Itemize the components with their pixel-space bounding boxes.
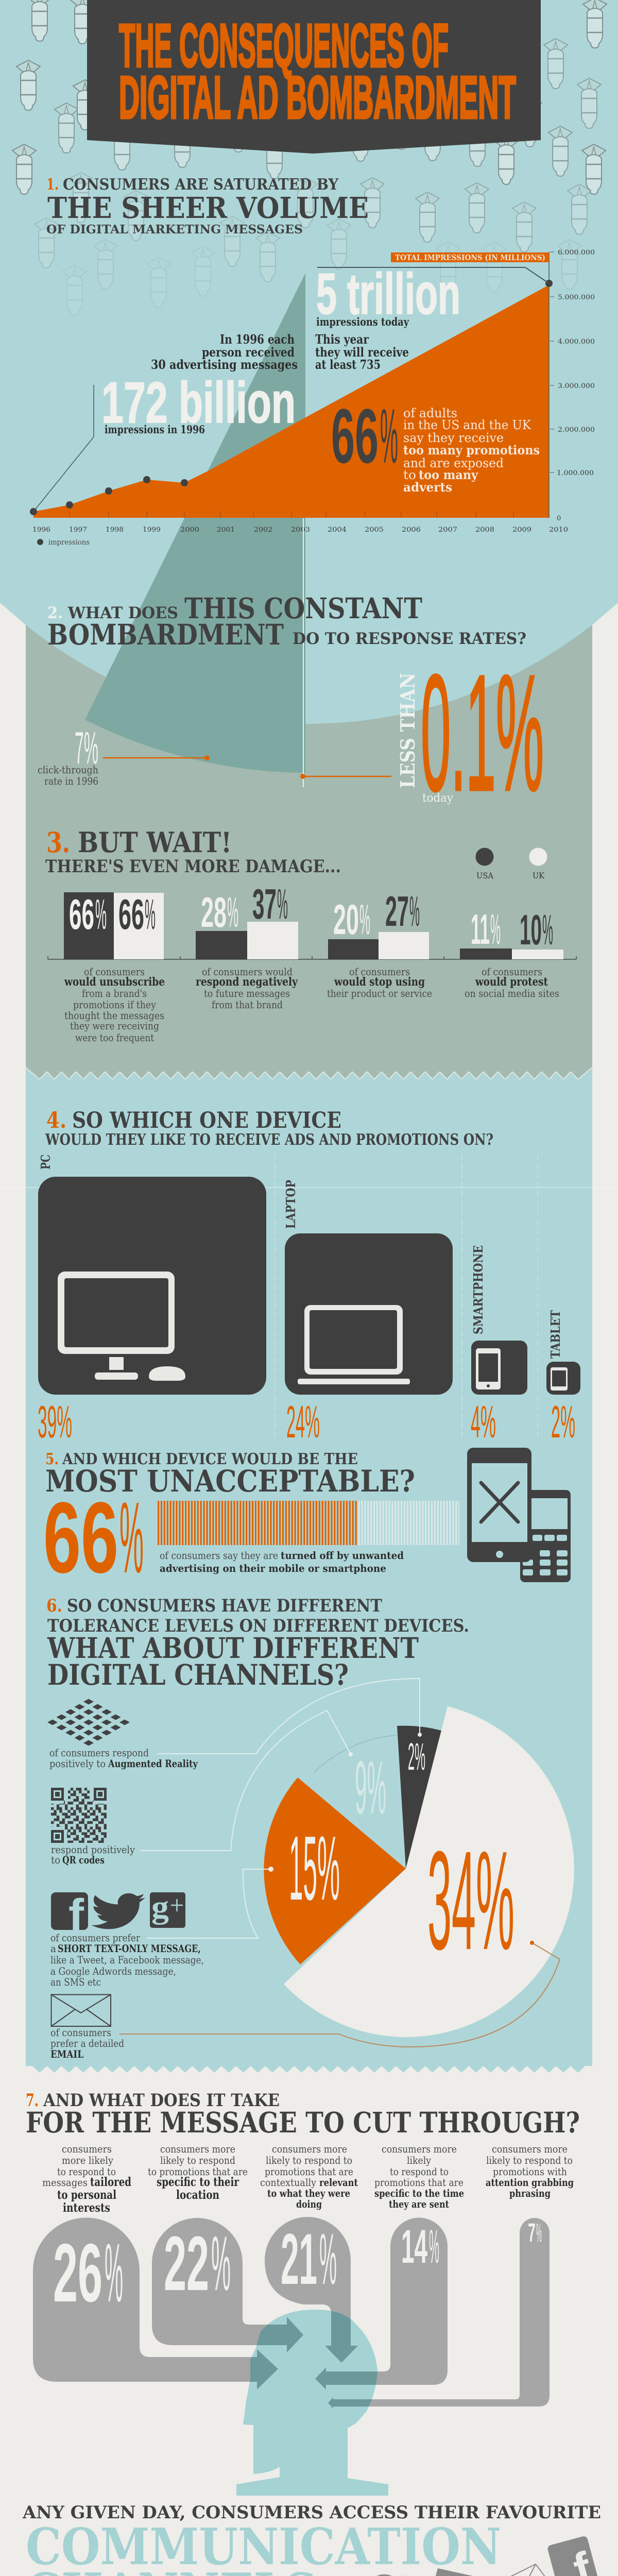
callout: 66% of adults: in the US and the UK (403, 418, 531, 432)
channel: short text-only message: a (50, 1942, 56, 1955)
device: smartphone 4%: 4% (471, 1396, 496, 1447)
heading: section 7: 7. (26, 2090, 39, 2111)
background: falling bombs (12, 0, 607, 315)
captions: damage columns: from a brand's (82, 987, 147, 999)
heading: section 2: WHAT DOES (67, 604, 178, 622)
value 22%: 22 (164, 2220, 209, 2307)
heading: section 6: TOLERANCE LEVELS ON DIFFERENT DEVICES. (47, 1616, 469, 1636)
captions: damage columns (64, 965, 559, 1044)
heading: section 6 (46, 1596, 469, 1691)
chart: y axis labels: 4.000.000 (558, 338, 595, 346)
captions: message columns: likely to respond (160, 2154, 235, 2166)
icon: mobile phones with cross (467, 1448, 571, 1582)
callout: this year (315, 332, 409, 372)
channel: short text-only message: of consumers prefer (50, 1931, 140, 1944)
captions: damage columns: their product or service (327, 987, 432, 999)
bars group 2: negative: 37 (252, 880, 277, 928)
chart: x axis years: 1999 (143, 526, 161, 534)
chart: x axis years: 2003 (291, 526, 310, 534)
chart: x axis years: 2009 (512, 526, 531, 534)
bars group 3: stop using: % (359, 895, 370, 943)
channel: QR codes (51, 1788, 135, 1866)
icon: augmented reality diamonds (47, 1699, 130, 1745)
captions: damage columns: of consumers (84, 965, 145, 978)
captions: message columns: consumers more (492, 2143, 568, 2155)
heading: section 1 (46, 176, 369, 236)
icon: twitter bird (91, 1893, 145, 1929)
banner: title (87, 0, 541, 154)
device: smartphone 4%: SMARTPHONE (471, 1245, 486, 1334)
stat: less than 0.1% today: LESS THAN (396, 673, 419, 788)
captions: message columns: they are sent (389, 2198, 450, 2210)
captions: damage columns: on social media sites (465, 987, 559, 999)
device: PC 39%: PC (38, 1155, 53, 1170)
captions: message columns: interests (63, 2201, 110, 2215)
stat: 7% click-through: rate in 1996 (44, 775, 98, 787)
axis line (548, 252, 550, 518)
legend: USA and UK: UK (533, 871, 545, 880)
chart: y axis labels: 3.000.000 (558, 382, 595, 390)
captions: damage columns: thought the messages (64, 1009, 164, 1022)
captions: damage columns: were too frequent (75, 1031, 154, 1044)
captions: damage columns: promotions if they (73, 998, 157, 1011)
device: laptop 24%: LAPTOP (283, 1180, 298, 1229)
panel: grey-green response rates and damage (26, 567, 592, 1082)
device: PC 39% (38, 1155, 266, 1447)
icon: google plus tilted (430, 2568, 473, 2576)
callout: 66% of adults: say they receive (403, 431, 504, 445)
callout: 172 billion (101, 370, 296, 436)
captions: message columns: to respond to (390, 2165, 449, 2178)
heading: section 1: CONSUMERS ARE SATURATED BY (63, 176, 339, 194)
captions: damage columns: to future messages (204, 987, 290, 999)
chart: arch arrows into head (33, 2217, 550, 2496)
heading: section 2: 2. (47, 604, 63, 622)
channel: detailed email: prefer a detailed (50, 2037, 124, 2049)
icon: smartphone (476, 1348, 501, 1389)
icon: head silhouette (236, 2310, 388, 2496)
heading: section 5: MOST UNACCEPTABLE? (45, 1464, 415, 1499)
chart: x axis years (32, 526, 568, 534)
chart: x axis years: 2000 (180, 526, 199, 534)
bars group 4: protest: % (490, 905, 501, 953)
bars group 4: protest: 11 (471, 905, 490, 953)
stat: 7% click-through: click-through (38, 764, 98, 776)
text: 2% (551, 1396, 575, 1447)
stat: 66% turned off: advertising on their mobile or smartphone (160, 1562, 386, 1574)
chart: x axis years: 2008 (475, 526, 494, 534)
panel: teal circle top background (0, 0, 618, 724)
arrows inside head (249, 2311, 377, 2409)
heading: section 2: BOMBARDMENT (47, 618, 284, 651)
callout: this year: This year (315, 332, 369, 347)
chart: wedge shadow pie (85, 273, 305, 773)
bar chart: damage (48, 880, 576, 959)
icon: twitter bird grey (331, 2574, 408, 2576)
chart: y axis labels: 6.000.000 (558, 249, 595, 257)
captions: message columns: specific to their (157, 2175, 239, 2189)
heading: section 2: THIS CONSTANT (184, 591, 422, 625)
channel: short text-only message: SHORT TEXT-ONLY MESSAGE, (58, 1942, 201, 1955)
callout: 66% of adults (331, 393, 540, 495)
divider: white centre line (303, 518, 304, 787)
bars group 4: protest: % (542, 906, 553, 954)
pie chart: channels (264, 1706, 574, 2037)
chart: y axis labels (550, 249, 595, 522)
icon: facebook tilted (547, 2535, 602, 2576)
captions: damage columns: they were receiving (70, 1020, 159, 1032)
captions: message columns (42, 2143, 574, 2215)
stat: 66% turned off: 66 (43, 1481, 118, 1594)
leader lines (33, 385, 94, 512)
stat: 7% click-through: 7% (75, 722, 98, 773)
connector lines: channels to pie (119, 1679, 560, 2047)
captions: damage columns: of consumers would (202, 965, 293, 978)
bars group 2: negative: % (227, 888, 238, 936)
callout: 66% of adults: of adults (403, 406, 457, 420)
value 7%: 7 (528, 2218, 536, 2247)
panel: teal with zigzag edges (26, 1067, 592, 2073)
icon: google plus (150, 1890, 185, 1928)
device: laptop 24%: 24% (286, 1396, 320, 1447)
bars group 1: unsubscribe (64, 890, 164, 959)
channel: QR codes: respond positively (51, 1843, 135, 1856)
bars group 3: stop using: % (409, 887, 420, 935)
channel: augmented reality: of consumers respond (49, 1747, 149, 1759)
captions: message columns: attention grabbing (486, 2176, 574, 2189)
channel: short text-only message: like a Tweet, a Facebook message, (50, 1954, 204, 1966)
chart: y axis labels: 2.000.000 (558, 426, 595, 434)
callout: 66% of adults: too many (419, 467, 478, 482)
captions: message columns: messages (42, 2176, 88, 2189)
icon: tablet (551, 1367, 568, 1391)
heading: section 1: OF DIGITAL MARKETING MESSAGES (46, 223, 303, 236)
bar: 66 of 100 stripes (158, 1501, 459, 1545)
device: smartphone 4% (471, 1245, 527, 1447)
value 21%: 21 (281, 2218, 317, 2299)
chart: x axis years: 2004 (328, 526, 347, 534)
icons: social and email (331, 2535, 602, 2576)
device: PC 39%: 39% (38, 1396, 72, 1447)
heading: section 4 (45, 1108, 493, 1149)
heading: section 2: DO TO RESPONSE RATES? (293, 630, 526, 648)
heading: section 3 (45, 826, 341, 877)
label: total impressions: TOTAL IMPRESSIONS (IN MILLIONS) (395, 253, 545, 262)
bars group 4: protest: 10 (520, 906, 542, 954)
heading: section 6: 6. (46, 1596, 62, 1616)
icon: facebook (51, 1890, 88, 1940)
channel: detailed email (50, 1995, 124, 2060)
heading: section 5: AND WHICH DEVICE WOULD BE THE (62, 1450, 358, 1468)
pie chart: channels: 9% (355, 1745, 386, 1829)
channel: augmented reality (47, 1699, 198, 1770)
x axis ticks (70, 511, 513, 518)
captions: message columns: to respond to (57, 2165, 116, 2178)
heading: section 7: AND WHAT DOES IT TAKE (43, 2090, 280, 2111)
heading: section 5: 5. (45, 1450, 59, 1468)
callout: this year: at least 735 (315, 357, 381, 372)
bars group 2: negative (196, 880, 298, 959)
callout: this year: they will receive (315, 345, 409, 360)
bars group 3: stop using: 20 (333, 895, 359, 943)
chart: y axis labels: 1.000.000 (557, 469, 594, 477)
heading: section 4: SO WHICH ONE DEVICE (72, 1108, 341, 1133)
captions: message columns: promotions with (493, 2165, 567, 2178)
channel: QR codes: QR codes (62, 1854, 105, 1866)
bars group 1: unsubscribe: 66 (118, 890, 144, 938)
chart: y axis labels: 0 (557, 515, 561, 522)
value 26%: 26 (53, 2227, 102, 2319)
chart: x axis years: 2007 (438, 526, 457, 534)
chart: arch arrows into head: % (211, 2220, 231, 2307)
chart legend: impressions: impressions (48, 538, 90, 547)
chart: arch arrows into head: % (536, 2218, 542, 2247)
callout: 172 billion: 172 billion (101, 370, 296, 435)
data points (30, 280, 553, 515)
bars group 4: protest (460, 905, 563, 959)
icon: laptop (298, 1305, 410, 1384)
captions: damage columns: respond negatively (196, 975, 298, 989)
callout: in 1996 (151, 332, 298, 372)
captions: message columns: to personal (57, 2188, 116, 2202)
heading: section 2 (47, 591, 526, 651)
callout: in 1996: 30 advertising messages (151, 357, 298, 372)
stat: 66% turned off: turned off by unwanted (281, 1549, 404, 1562)
value 14%: 14 (401, 2221, 427, 2273)
chart: x axis years: 1996 (32, 526, 50, 534)
captions: message columns: consumers more (382, 2143, 457, 2155)
channel: short text-only message (50, 1890, 204, 1988)
callout: 5 trillion: 5 trillion (316, 262, 460, 326)
heading: section 3: THERE'S EVEN MORE DAMAGE... (45, 856, 341, 877)
icon: facebook: f (68, 1890, 84, 1940)
bars group 1: unsubscribe: % (95, 890, 107, 938)
bars group 2: negative: % (277, 880, 288, 928)
stat: 66% turned off: of consumers say they are (160, 1549, 278, 1562)
captions: message columns: consumers more (272, 2143, 347, 2155)
captions: message columns: phrasing (509, 2187, 551, 2199)
captions: message columns: likely to respond to (486, 2154, 573, 2166)
chart: arch arrows into head: % (319, 2218, 337, 2299)
heading: section 4: 4. (46, 1108, 66, 1133)
captions: message columns: contextually (260, 2176, 317, 2189)
callout: 66% of adults: too many promotions (403, 443, 540, 457)
captions: damage columns: would protest (475, 975, 548, 989)
heading: communication channels: COMMUNICATION (26, 2517, 501, 2576)
chart: arch arrows into head: % (429, 2221, 439, 2273)
channel: augmented reality: positively to (49, 1757, 106, 1770)
chart: y axis labels: 5.000.000 (558, 294, 595, 301)
stat: less than 0.1% today: today (422, 792, 454, 805)
captions: message columns: promotions that are (265, 2165, 353, 2178)
channel: short text-only message: a Google Adwords message, (50, 1965, 176, 1977)
icon: google plus: g (151, 1890, 169, 1925)
heading: section 4: WOULD THEY LIKE TO RECEIVE ADS AND PROMOTIONS ON? (45, 1131, 493, 1149)
captions: message columns: promotions that are (374, 2176, 464, 2189)
captions: message columns: consumers (62, 2143, 112, 2155)
captions: message columns: specific to the time (374, 2187, 464, 2199)
bars group 3: stop using: 27 (385, 887, 409, 935)
icon: envelope tilted (489, 2564, 548, 2576)
pie chart: channels: 2% (408, 1735, 425, 1778)
bars group 1: unsubscribe: % (145, 890, 156, 938)
heading: section 3: 3. (46, 826, 70, 859)
bars group 2: negative: 28 (201, 888, 227, 936)
heading: section 7 (26, 2090, 580, 2139)
device: tablet 2%: TABLET (548, 1310, 563, 1359)
captions: damage columns: of consumers (482, 965, 542, 978)
chart: x axis years: 2005 (365, 526, 384, 534)
chart: x axis years: 2010 (549, 526, 568, 534)
captions: message columns: relevant (319, 2176, 358, 2189)
channel: detailed email: EMAIL (50, 2048, 83, 2060)
bars group 1: unsubscribe: 66 (69, 890, 94, 938)
callout: 66% of adults: to (403, 468, 416, 482)
icon: envelope (52, 1995, 111, 2026)
captions: damage columns: of consumers (349, 965, 410, 978)
captions: message columns: location (176, 2188, 219, 2202)
value 21% (281, 2218, 337, 2299)
callout: 66% of adults: % (380, 393, 398, 479)
captions: damage columns: would unsubscribe (64, 975, 165, 989)
captions: message columns: doing (296, 2198, 322, 2210)
callout: in 1996: person received (202, 345, 295, 360)
stat: less than 0.1% today (300, 640, 544, 825)
captions: message columns: to what they were (267, 2187, 350, 2199)
channel: short text-only message: an SMS etc (50, 1976, 101, 1988)
channel: QR codes: to (51, 1854, 60, 1866)
legend: USA and UK: USA (476, 871, 493, 880)
callout: in 1996: In 1996 each (220, 332, 295, 347)
channel: augmented reality: Augmented Reality (108, 1757, 198, 1770)
stat: 66% turned off (43, 1481, 459, 1594)
captions: message columns: consumers more (160, 2143, 235, 2155)
stat: 66% turned off: % (119, 1481, 144, 1594)
channel: detailed email: of consumers (50, 2026, 111, 2039)
captions: message columns: likely (407, 2154, 432, 2166)
legend: USA and UK (476, 848, 547, 880)
callout: 172 billion: impressions in 1996 (105, 423, 205, 436)
callout: 66% of adults: and are exposed (403, 456, 504, 470)
captions: damage columns: from that brand (212, 998, 283, 1011)
captions: damage columns: would stop using (334, 975, 425, 989)
chart: x axis years: 1997 (69, 526, 87, 534)
bars group 3: stop using (328, 887, 429, 959)
heading: section 1: THE SHEER VOLUME (47, 191, 369, 225)
heading: any given day: ANY GIVEN DAY, CONSUMERS ACCESS THEIR FAVOURITE (22, 2502, 601, 2523)
captions: message columns: to promotions that are (148, 2165, 248, 2178)
captions: message columns: more likely (62, 2154, 114, 2166)
captions: message columns: tailored (90, 2175, 131, 2189)
chart: arch arrows into head: % (105, 2227, 123, 2319)
icon: desktop computer (58, 1272, 185, 1381)
heading: section 6: WHAT ABOUT DIFFERENT (47, 1631, 419, 1665)
callout: 66% of adults: 66 (331, 393, 379, 479)
chart: x axis years: 2001 (217, 526, 235, 534)
heading: section 1: 1. (46, 176, 59, 194)
chart: x axis years: 2006 (402, 526, 421, 534)
heading: section 5 (45, 1450, 415, 1499)
chart: x axis years: 1998 (106, 526, 124, 534)
icon: QR code (51, 1788, 107, 1843)
callout: 5 trillion: impressions today (316, 315, 409, 328)
captions: message columns: likely to respond to (266, 2154, 352, 2166)
heading: section 6: DIGITAL CHANNELS? (47, 1658, 349, 1691)
chart: x axis years: 2002 (254, 526, 272, 534)
pie chart: channels: 15% (289, 1817, 340, 1919)
heading: section 3: BUT WAIT! (78, 826, 232, 859)
chart: total impressions area (30, 252, 553, 518)
callout: 5 trillion (316, 262, 460, 328)
device: tablet 2% (546, 1310, 580, 1447)
callout: 66% of adults: adverts (403, 480, 452, 495)
device: laptop 24% (283, 1180, 453, 1447)
heading: section 6: SO CONSUMERS HAVE DIFFERENT (67, 1596, 382, 1616)
stat: 7% click-through (38, 722, 210, 787)
